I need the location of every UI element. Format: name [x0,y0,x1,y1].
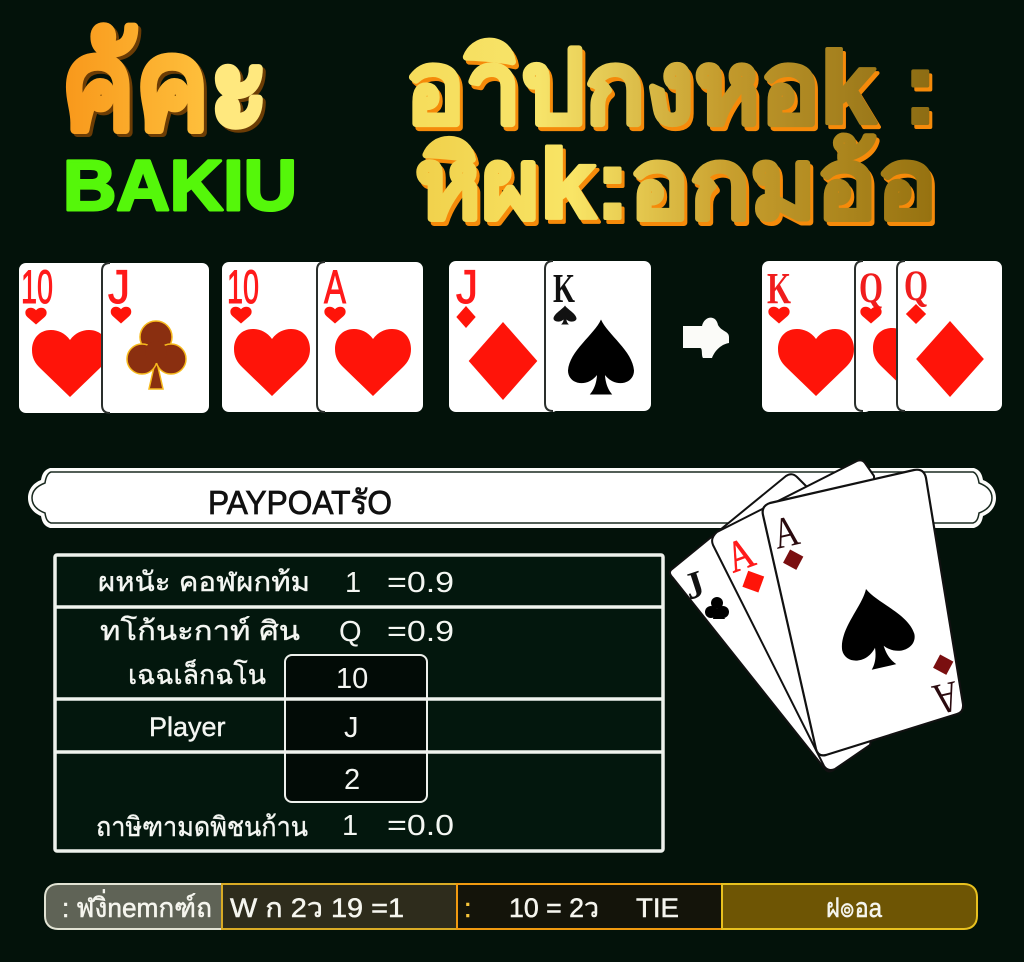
back card: J clubs: J [679,563,710,609]
card group 4: K hearts, Q hearts, Q diamonds [762,261,1002,412]
row: player: Player [149,712,226,742]
segment: result: ฝ๏อa [826,893,883,923]
title: left heading: คัคะ [64,17,272,160]
front card: A spades: A [768,505,804,559]
card group 4: K hearts, Q hearts, Q diamonds: Q [904,263,928,310]
segment: tie: : [464,893,472,923]
card pair 2: 10 hearts, A hearts [222,260,423,412]
middle card: A diamonds [712,460,880,770]
row: second bet: ทโก้นะกาท์ ศิน [100,615,300,646]
arrow [683,318,729,358]
card pair 3: J diamonds, K spades [449,260,651,412]
fanned playing cards [670,460,964,772]
segment: tie: 10 = 2ว [509,893,599,923]
payout banner [28,468,996,528]
segment: tie: TIE [636,893,679,923]
row: player [149,712,358,744]
row: last bet [96,810,454,842]
front card: A spades [763,470,964,755]
row: second bet [100,615,454,648]
row: last bet: ถาษิฑามดพิชนก้าน [96,812,308,842]
row: player: J [344,712,358,744]
middle card: A diamonds: A [720,527,761,582]
row: second bet: =0.9 [387,616,454,648]
row: first bet: ผหนัะ คอฬผกท้ม [98,567,310,597]
row: last bet: =0.0 [387,810,454,842]
segment: result [722,884,977,929]
bottom summary bar [45,884,977,929]
card pair 2: 10 hearts, A hearts: 10 [227,260,259,313]
segment: label [45,884,222,929]
card pair 1: 10 hearts, J clubs [19,260,209,413]
payout table [55,555,663,851]
card group 4: K hearts, Q hearts, Q diamonds: Q [859,265,883,312]
title: gold heading: อาิปกงหอk : [408,35,940,149]
row: first bet [98,567,454,599]
title: left heading: คัคะ [61,14,269,157]
card pair 3: J diamonds, K spades: K [553,265,575,311]
row: third bet: 10 [336,663,368,695]
segment: tie [457,884,722,929]
back card: J clubs [670,474,880,772]
row: first bet: 1 [345,567,361,599]
segment: win: W ก 2ว 19 =1 [230,893,404,923]
title: gold heading [405,31,940,243]
title: gold heading: อาิปกงหอk : [405,31,937,145]
row: third bet [128,657,368,695]
row: last bet: 1 [342,810,358,842]
card pair 2: 10 hearts, A hearts: A [324,260,346,313]
segment: label: : ฬงิ่nemกฑ์ถ [62,889,212,923]
row: value 2: 2 [344,764,360,796]
title: gold heading: หิผk:อกมอ้อ [418,133,940,243]
title: gold heading: หิผk:อกมอ้อ [415,129,937,239]
banner title: PAYPOATรัO [208,484,392,521]
row: second bet: Q [339,616,362,648]
card pair 1: 10 hearts, J clubs: J [108,260,130,313]
front card: A spades: A [928,671,964,725]
card pair 3: J diamonds, K spades: J [456,260,478,313]
card pair 1: 10 hearts, J clubs: 10 [21,260,53,313]
title: green BAKIU: BAKIU [63,147,297,226]
card group 4: K hearts, Q hearts, Q diamonds: K [767,264,791,313]
row: third bet: เฉฉเล็กฉโน [128,657,266,690]
segment: win [222,884,457,929]
row: first bet: =0.9 [387,567,454,599]
